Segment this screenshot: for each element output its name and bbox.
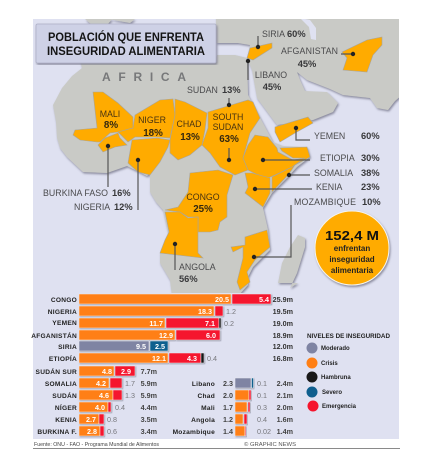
bar chart: smaller countries: [173, 378, 293, 436]
country: South Sudan: [202, 100, 260, 175]
row: Sudan: 4.6: [99, 391, 109, 400]
country: Syria: [247, 43, 272, 60]
row: Libano: 2.3: [223, 379, 233, 388]
row: Niger: NÍGER: [55, 403, 77, 412]
label: Mozambique: 10%: [362, 197, 381, 207]
country: Congo: [165, 170, 233, 232]
row: Mali: Mali: [201, 405, 215, 412]
label: Angola: [179, 262, 216, 284]
label: Sudan: [187, 85, 241, 95]
row: Chad: 2.1m: [277, 391, 293, 400]
callout: 152,4 M: alimentaria: [331, 266, 374, 275]
row: Sudan Sur: 2.9: [121, 367, 131, 376]
legend: niveles de inseguridad: NIVELES DE INSEGURIDAD: [307, 333, 391, 340]
label: Somalia: SOMALIA: [314, 168, 353, 178]
graphic news credit: © GRAPHIC NEWS: [244, 441, 296, 448]
label: Congo: CONGO: [186, 192, 220, 202]
callout: 152,4 M: [315, 211, 389, 285]
label: Siria: [262, 29, 306, 39]
country: Angola: [160, 212, 203, 258]
row: Niger: [55, 402, 157, 412]
title box: [36, 24, 216, 63]
country: Nigeria: [128, 138, 170, 175]
row: Sudan Sur: [36, 366, 157, 376]
row: Libano: Libano: [192, 381, 215, 388]
label: Yemen: 60%: [361, 131, 380, 141]
label: Nigeria: 12%: [114, 202, 133, 212]
label: Afganistan: 45%: [298, 59, 317, 69]
row: Kenia: 0.8: [107, 415, 117, 424]
row: Congo: 20.5: [215, 295, 229, 304]
label: South Sudan: SOUTH: [213, 112, 243, 122]
country: Niger: [118, 99, 175, 142]
legend item: Hambruna: Hambruna: [321, 375, 351, 381]
leader lines and dots: [106, 36, 355, 270]
label: Mali: 8%: [104, 120, 118, 131]
row: Sudan Sur: 7.7m: [141, 367, 157, 376]
row: Etiopia: ETIOPÍA: [49, 354, 77, 363]
row: Niger: 4.4m: [141, 403, 157, 412]
legend item: Severo: Severo: [322, 390, 342, 396]
title box: POBLACIÓN QUE ENFRENTA: [48, 31, 204, 44]
row: Burkina F.: BURKINA F.: [37, 429, 77, 436]
row: Sudan: SUDÁN: [52, 391, 77, 400]
highlighted countries: [73, 37, 382, 290]
row: Afganistan: 6.0: [206, 331, 216, 340]
row: Mozambique: [173, 426, 293, 436]
row: Afganistan: [31, 330, 293, 340]
row: Libano: 2.4m: [277, 379, 293, 388]
label: Niger: NIGER: [138, 115, 166, 125]
row: Yemen: YEMEN: [52, 320, 77, 327]
row: Angola: Angola: [191, 417, 215, 424]
row: Mozambique: 1.4: [223, 427, 233, 436]
label: Somalia: [314, 168, 380, 178]
row: Angola: 0.4: [257, 415, 267, 424]
map of Africa and the Middle East: [53, 15, 402, 296]
row: Mozambique: Mozambique: [173, 429, 215, 436]
label: Congo: 25%: [193, 204, 213, 215]
row: Afganistan: 18.9m: [273, 331, 293, 340]
row: Siria: SIRIA: [58, 344, 77, 351]
label: Chad: 13%: [180, 132, 200, 143]
row: Chad: 0.1: [257, 391, 267, 400]
label: Mozambique: MOZAMBIQUE: [294, 197, 356, 207]
country: Afghanistan: [342, 37, 382, 72]
row: Siria: 9.5: [136, 342, 146, 351]
label: Siria: SIRIA: [262, 29, 285, 39]
row: Etiopia: 4.3: [187, 354, 197, 363]
row: Etiopia: 16.8m: [273, 354, 293, 363]
country: Mozambique: [231, 230, 270, 290]
row: Yemen: 11.7: [149, 319, 163, 328]
row: Niger: 4.0: [95, 403, 105, 412]
row: Burkina F.: 3.4m: [141, 427, 157, 436]
row: Etiopia: 12.1: [152, 354, 166, 363]
row: Angola: 1.6m: [277, 415, 293, 424]
row: Somalia: [45, 378, 157, 388]
label: Etiopia: ETIOPIA: [320, 153, 355, 163]
row: Sudan: [52, 390, 157, 400]
label: Burkina Faso: 16%: [112, 188, 131, 198]
label: Chad: CHAD: [177, 119, 201, 129]
label: Kenia: 23%: [361, 182, 380, 192]
row: Yemen: 19.0m: [273, 319, 293, 328]
label: Mali: MALI: [100, 109, 120, 119]
row: Siria: 12.0m: [273, 342, 293, 351]
label: Angola: 56%: [179, 274, 198, 284]
row: Kenia: [55, 414, 157, 424]
label: Mali: [100, 109, 120, 131]
row: Niger: 0.4: [115, 403, 125, 412]
label: Burkina Faso: BURKINA FASO: [43, 188, 108, 198]
row: Somalia: SOMALIA: [45, 381, 77, 388]
row: Mali: 1.7: [223, 403, 233, 412]
row: Sudan Sur: 4.8: [102, 367, 112, 376]
country: Mali: [73, 92, 133, 142]
row: Chad: 2.0: [223, 391, 233, 400]
row: Kenia: KENIA: [55, 417, 77, 424]
callout: 152,4 M: enfrentan: [334, 244, 370, 253]
row: Etiopia: [49, 353, 293, 363]
row: Siria: 2.5: [155, 342, 165, 351]
label: Nigeria: [74, 202, 133, 212]
row: Congo: 5.4: [259, 295, 269, 304]
row: Chad: Chad: [198, 393, 215, 400]
row: Nigeria: 19.5m: [273, 307, 293, 316]
legend item: Emergencia: Emergencia: [322, 404, 357, 410]
title box: INSEGURIDAD ALIMENTARIA: [47, 46, 205, 58]
row: Mali: 2.0m: [277, 403, 293, 412]
label: Kenia: KENIA: [316, 182, 343, 192]
row: Congo: 25.9m: [273, 295, 293, 304]
row: Angola: 1.2: [223, 415, 233, 424]
label: Libano: 45%: [263, 82, 282, 92]
row: Nigeria: [48, 306, 293, 316]
row: Mali: [201, 402, 293, 412]
label: Congo: [186, 192, 220, 215]
country: Burkina Faso: [98, 133, 127, 152]
label: Yemen: YEMEN: [314, 131, 345, 141]
country: Somalia: [272, 147, 310, 192]
row: Mali: 0.3: [257, 403, 267, 412]
row: Kenia: 3.5m: [141, 415, 157, 424]
label: Libano: LIBANO: [255, 70, 287, 80]
row: Mozambique: 0.02: [257, 427, 271, 436]
row: Chad: [198, 390, 293, 400]
row: Congo: [51, 294, 293, 304]
row: Nigeria: 18.3: [198, 307, 212, 316]
label: Libano: [255, 70, 287, 92]
row: Afganistan: AFGANISTÁN: [31, 331, 77, 340]
row: Nigeria: 1.2: [226, 307, 236, 316]
country: Yemen: [275, 117, 313, 142]
row: Nigeria: NIGERIA: [48, 309, 77, 316]
inland sea: [301, 19, 316, 40]
row: Somalia: 1.7: [125, 379, 135, 388]
row: Burkina F.: [37, 426, 157, 436]
continent label: Africa: AFRICA: [102, 70, 186, 84]
country labels on map: [43, 29, 381, 284]
label: Niger: 18%: [143, 128, 163, 139]
row: Sudan: 5.9m: [141, 391, 157, 400]
row: Yemen: [52, 318, 293, 328]
row: Libano: [192, 378, 293, 388]
row: Sudan Sur: SUDÁN SUR: [36, 367, 77, 376]
label: Etiopia: 30%: [361, 153, 380, 163]
legend: niveles de inseguridad: [306, 333, 391, 412]
row: Etiopia: 0.4: [207, 354, 217, 363]
label: Somalia: 38%: [361, 168, 380, 178]
panel: background sea: [33, 19, 399, 439]
legend item: Crisis: Crisis: [321, 361, 338, 367]
label: Afganistan: [281, 46, 338, 69]
row: Libano: 0.1: [257, 379, 267, 388]
label: South Sudan: 63%: [219, 134, 239, 145]
label: South Sudan: SUDAN: [213, 122, 243, 132]
label: Niger: [138, 115, 166, 139]
row: Mozambique: 1.4m: [277, 427, 293, 436]
row: Siria: [58, 341, 293, 351]
legend item: Moderado: Moderado: [321, 346, 350, 352]
label: Angola: ANGOLA: [179, 262, 216, 272]
row: Afganistan: 12.9: [159, 331, 173, 340]
row: Yemen: 7.1: [205, 319, 215, 328]
row: Burkina F.: 0.6: [107, 427, 117, 436]
label: Sudan: SUDAN: [187, 85, 218, 95]
row: Congo: CONGO: [51, 297, 77, 304]
label: Afganistan: AFGANISTAN: [281, 46, 338, 56]
label: Kenia: [316, 182, 380, 192]
callout: 152,4 M: 152,4 M: [325, 228, 379, 243]
label: South Sudan: [213, 112, 243, 145]
label: Sudan: 13%: [222, 85, 241, 95]
label: Siria: 60%: [287, 29, 306, 39]
bar chart: main countries: [31, 294, 293, 436]
row: Angola: [191, 414, 293, 424]
label: Etiopia: [320, 153, 380, 163]
label: Nigeria: NIGERIA: [74, 202, 110, 212]
source credit: Fuente: ONU - FAO - Programa Mundial de Alimentos: [34, 442, 159, 448]
callout: 152,4 M: inseguridad: [329, 255, 375, 264]
label: Chad: [177, 119, 201, 143]
row: Yemen: 0.2: [224, 319, 234, 328]
country: Ethiopia: [243, 135, 305, 178]
row: Burkina F.: 2.8: [87, 427, 97, 436]
land masses: [53, 15, 402, 296]
row: Somalia: 5.9m: [141, 379, 157, 388]
country: Kenya: [245, 173, 270, 207]
row: Kenia: 2.7: [86, 415, 96, 424]
label: Yemen: [314, 131, 380, 141]
row: Sudan: 1.3: [125, 391, 135, 400]
row: Somalia: 4.2: [96, 379, 106, 388]
country: Chad: [170, 99, 207, 160]
